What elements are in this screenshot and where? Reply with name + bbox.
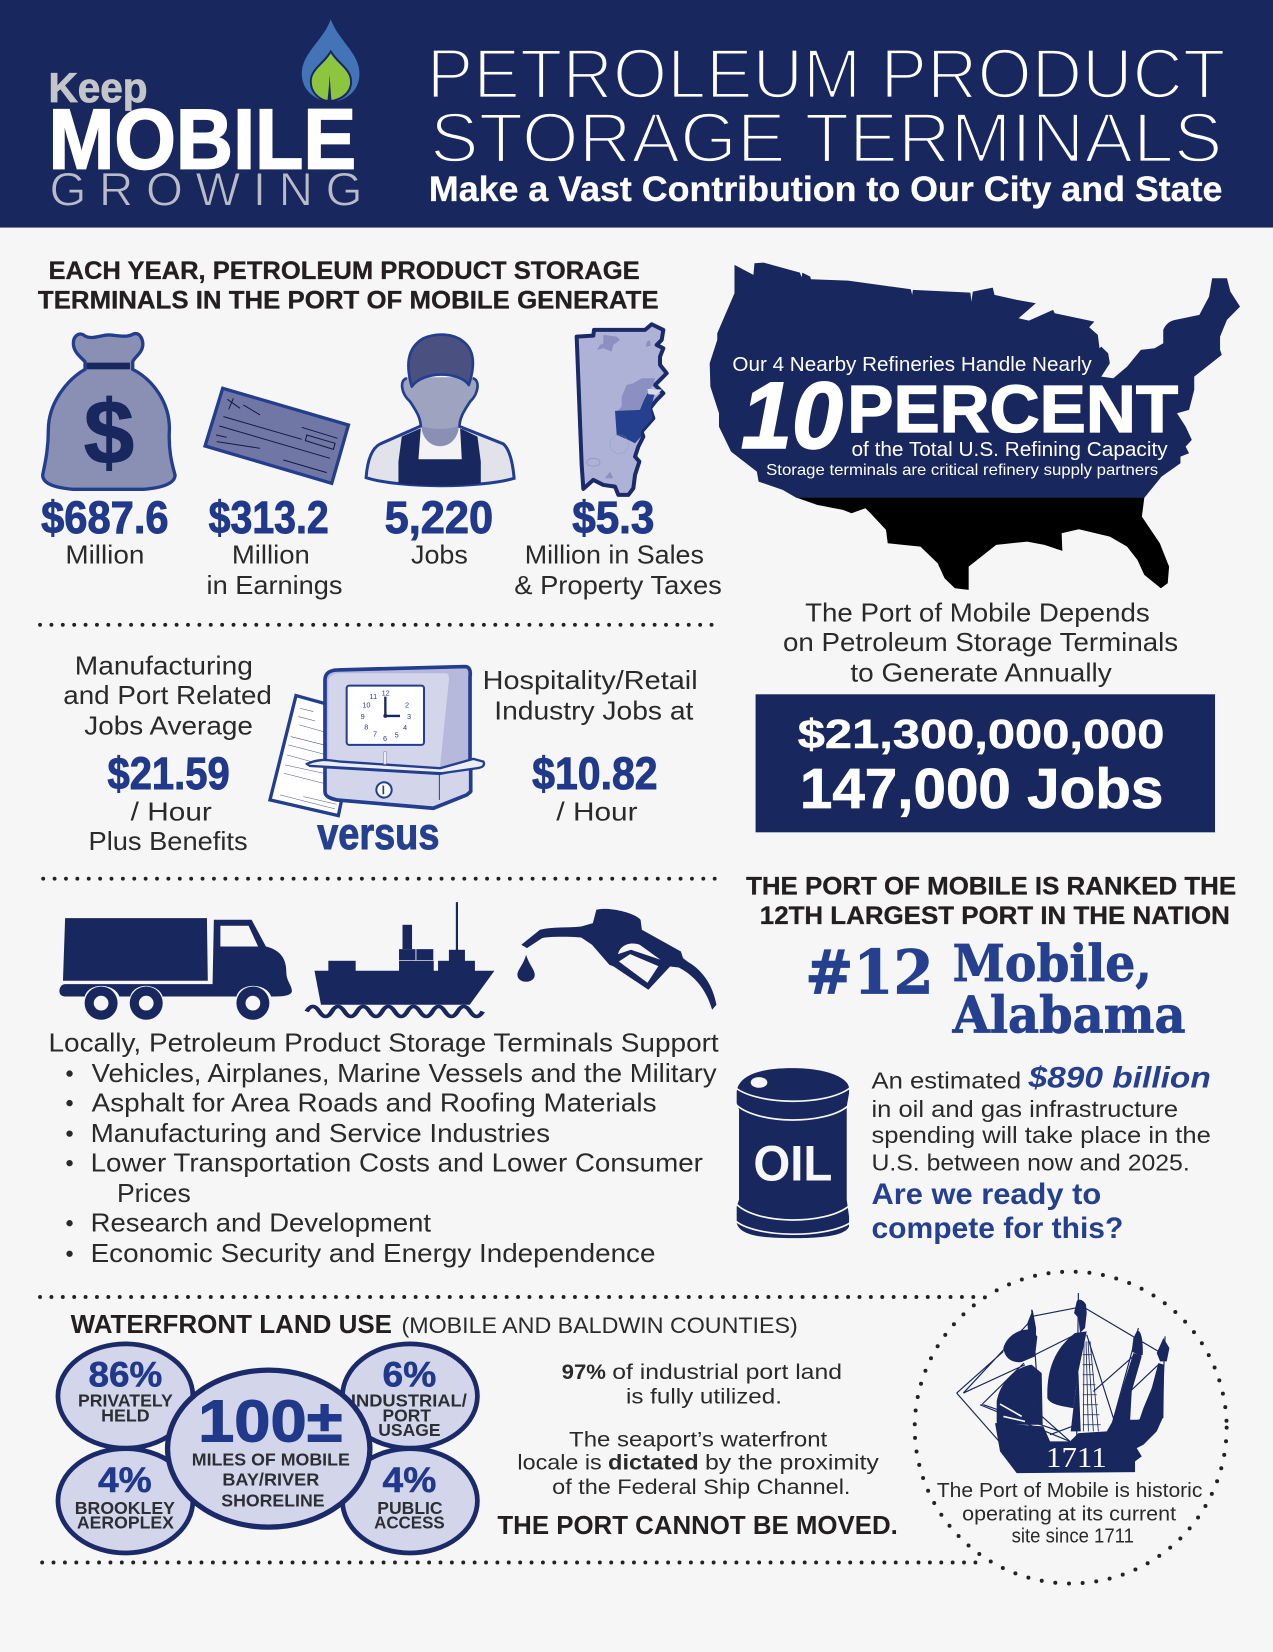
bubble: miles of shoreline: MILES OF MOBILE <box>192 1450 350 1470</box>
stat: jobs <box>385 492 493 570</box>
text: port depends <box>783 598 1178 688</box>
text: port land explanation: dictated <box>608 1450 699 1475</box>
icon: money bag <box>43 334 175 489</box>
stat: earnings: $313.2 <box>209 492 329 543</box>
map: United States split silhouette <box>710 263 1240 590</box>
text: locally support list: Asphalt for Area Roads and Roofing Materials <box>92 1088 657 1118</box>
text: ten percent callout: of the Total U.S. Refining Capacity <box>851 438 1168 461</box>
text: port land explanation: is fully utilized. <box>626 1383 782 1408</box>
text: manufacturing wage <box>63 650 272 856</box>
heading: port ranked <box>746 872 1236 930</box>
stat: earnings: in Earnings <box>207 570 342 600</box>
chart: land use bubbles <box>58 1344 477 1553</box>
text: infrastructure spending: in oil and gas infrastructure <box>871 1096 1178 1122</box>
bubble: privately held: PRIVATELY <box>78 1391 173 1411</box>
text: historic site: site since 1711 <box>1012 1525 1134 1547</box>
heading: waterfront land use <box>71 1309 798 1339</box>
icon: sailing ship 1711 <box>957 1293 1169 1474</box>
icon: sailing ship 1711: 1711 <box>1046 1443 1107 1474</box>
text: number 12 Mobile Alabama: Mobile, <box>953 934 1152 993</box>
panel: waterfront land use <box>58 1309 898 1553</box>
icon: time clock and time card: 3 <box>407 712 411 721</box>
bubble: privately held <box>58 1344 193 1448</box>
title <box>427 34 1226 209</box>
panel: annual port impact <box>756 598 1215 832</box>
text: port land explanation: THE PORT CANNOT BE MOVED. <box>497 1510 898 1540</box>
panel: port ranking <box>736 872 1236 1245</box>
icon: oil drop with leaf <box>302 19 359 101</box>
title: Make a Vast Contribution to Our City and State <box>429 171 1222 209</box>
panel: wage comparison <box>63 650 698 859</box>
text: locally support list: Prices <box>117 1178 191 1208</box>
callout: dollars and jobs <box>756 694 1215 832</box>
icon: time clock and time card: 12 <box>382 689 390 698</box>
text: infrastructure spending: U.S. between now and 2025. <box>871 1150 1190 1176</box>
icon: time clock and time card: 4 <box>403 723 407 732</box>
text: ten percent callout: Storage terminals are critical refinery supply partners <box>766 462 1159 479</box>
text: hospitality wage: Industry Jobs at <box>494 696 694 726</box>
bubble: miles of shoreline: SHORELINE <box>221 1491 325 1511</box>
text: locally support list: Economic Security and Energy Independence <box>91 1238 655 1268</box>
bubble: privately held: 86% <box>89 1357 162 1394</box>
text: locally support list: Locally, Petroleum Product Storage Terminals Support <box>48 1027 719 1057</box>
panel: historic port badge <box>915 1272 1227 1584</box>
heading: waterfront land use: WATERFRONT LAND USE <box>71 1309 392 1339</box>
icon: worker <box>366 335 514 486</box>
stat: taxes: $5.3 <box>572 492 654 543</box>
callout: dollars and jobs: $21,300,000,000 <box>798 711 1164 757</box>
text: locally support list: Research and Development <box>91 1208 432 1238</box>
text: port land explanation: locale is <box>517 1450 602 1475</box>
heading: each year <box>38 257 659 315</box>
text: ten percent callout: Our 4 Nearby Refineries Handle Nearly <box>732 353 1092 376</box>
text: number 12 Mobile Alabama <box>805 934 1186 1044</box>
text: port land explanation: of the Federal Ship Channel. <box>552 1474 850 1499</box>
text: ten percent callout: PERCENT <box>847 373 1178 447</box>
text: historic site: operating at its current <box>962 1503 1177 1525</box>
icon: time clock and time card: 6 <box>383 734 387 743</box>
icon: ship <box>307 902 494 1016</box>
text: manufacturing wage: Manufacturing <box>75 650 253 680</box>
panel: annual generation stats <box>38 257 722 600</box>
stat: economic output: Million <box>65 540 144 570</box>
text: infrastructure spending: An estimated <box>871 1067 1021 1093</box>
title: PETROLEUM PRODUCT <box>427 34 1226 113</box>
heading: each year: TERMINALS IN THE PORT OF MOBILE GENERATE <box>38 287 659 315</box>
text: manufacturing wage: Plus Benefits <box>89 826 248 856</box>
bubble: brookley aeroplex: 4% <box>98 1462 152 1500</box>
bubble: industrial port usage: 6% <box>383 1357 436 1394</box>
heading: each year: EACH YEAR, PETROLEUM PRODUCT STORAGE <box>48 257 640 285</box>
icon: time clock and time card: 10 <box>362 701 370 710</box>
icon: check <box>205 388 348 483</box>
heading: waterfront land use: (MOBILE AND BALDWIN COUNTIES) <box>402 1313 798 1338</box>
bubble: public access: ACCESS <box>374 1513 445 1533</box>
text: manufacturing wage: Jobs Average <box>84 710 253 740</box>
stat: taxes: & Property Taxes <box>514 570 722 600</box>
text: port depends: The Port of Mobile Depends <box>805 598 1150 628</box>
text: port land explanation: by the proximity <box>705 1450 879 1475</box>
bubble: public access <box>342 1449 477 1553</box>
bubble: privately held: HELD <box>101 1405 150 1425</box>
icon: county map of Alabama <box>577 324 667 495</box>
stat: jobs: Jobs <box>411 540 468 570</box>
bubble: industrial port usage <box>342 1344 477 1448</box>
text: number 12 Mobile Alabama: Alabama <box>952 986 1186 1044</box>
text: infrastructure spending: compete for this? <box>871 1212 1123 1245</box>
title: STORAGE TERMINALS <box>430 98 1222 177</box>
panel: header banner <box>0 0 1273 228</box>
text: hospitality wage <box>483 665 698 827</box>
icon: time clock and time card: 2 <box>405 701 409 710</box>
logo: Keep Mobile Growing: Keep <box>48 64 148 111</box>
stat: economic output <box>41 492 169 570</box>
icon: time clock and time card: 9 <box>361 712 365 721</box>
icon: time clock and time card: 7 <box>373 730 377 739</box>
text: port depends: on Petroleum Storage Terminals <box>783 627 1178 657</box>
text: locally support list: Lower Transportation Costs and Lower Consumer <box>91 1148 703 1178</box>
bubble: public access: PUBLIC <box>377 1498 443 1518</box>
icon: time clock and time card: 11 <box>370 692 377 701</box>
bubble: public access: 4% <box>383 1462 436 1500</box>
text: historic site <box>937 1480 1202 1547</box>
text: port land explanation: The seaport’s waterfront <box>569 1427 827 1452</box>
text: port land explanation: of industrial port land <box>612 1359 842 1384</box>
icon: oil barrel: OIL <box>753 1135 832 1191</box>
text: number 12 Mobile Alabama: #12 <box>805 938 934 1009</box>
bubble: miles of shoreline: BAY/RIVER <box>222 1470 320 1490</box>
text: infrastructure spending: $890 billion <box>1027 1061 1211 1094</box>
icon: truck <box>59 918 292 1020</box>
bubble: miles of shoreline: 100± <box>198 1388 342 1454</box>
stat: taxes <box>514 492 722 600</box>
heading: port ranked: 12TH LARGEST PORT IN THE NATION <box>760 902 1230 930</box>
text: ten percent callout <box>732 353 1178 479</box>
bubble: brookley aeroplex: AEROPLEX <box>77 1513 174 1533</box>
panel: local support <box>48 902 719 1268</box>
logo: Keep Mobile Growing: MOBILE <box>48 93 356 188</box>
stat: taxes: Million in Sales <box>525 540 704 570</box>
text: hospitality wage: $10.82 <box>532 748 658 799</box>
stat: earnings <box>207 492 342 600</box>
text: infrastructure spending: Are we ready to <box>871 1178 1101 1211</box>
heading: port ranked: THE PORT OF MOBILE IS RANKED THE <box>746 872 1236 900</box>
text: hospitality wage: Hospitality/Retail <box>483 665 698 695</box>
label: versus: versus <box>317 810 439 859</box>
logo: Keep Mobile Growing: GROWING <box>50 163 363 216</box>
stat: jobs: 5,220 <box>385 492 493 543</box>
text: infrastructure spending <box>871 1061 1211 1245</box>
text: locally support list: Manufacturing and Service Industries <box>91 1118 550 1148</box>
text: port land explanation <box>497 1359 898 1540</box>
panel: refinery map <box>710 263 1240 590</box>
icon: fuel nozzle <box>517 909 716 1010</box>
text: infrastructure spending: spending will take place in the <box>871 1122 1211 1148</box>
bubble: industrial port usage: USAGE <box>378 1420 440 1440</box>
text: hospitality wage: / Hour <box>556 797 638 827</box>
callout: dollars and jobs: 147,000 Jobs <box>800 757 1163 821</box>
text: locally support list: Vehicles, Airplanes, Marine Vessels and the Military <box>92 1058 717 1088</box>
bubble: brookley aeroplex <box>58 1449 193 1553</box>
bubble: miles of shoreline <box>168 1370 370 1527</box>
bubble: brookley aeroplex: BROOKLEY <box>75 1498 175 1518</box>
text: manufacturing wage: $21.59 <box>107 748 230 799</box>
stat: earnings: Million <box>232 540 310 570</box>
stat: economic output: $687.6 <box>41 492 169 543</box>
text: ten percent callout: 10 <box>741 363 843 469</box>
text: port land explanation: 97% <box>562 1359 606 1384</box>
icon: time clock and time card: 5 <box>395 731 399 740</box>
icon: time clock and time card: 8 <box>364 723 368 732</box>
icon: oil barrel <box>736 1068 850 1238</box>
text: manufacturing wage: / Hour <box>131 797 212 827</box>
text: locally support list <box>48 1027 719 1268</box>
text: port depends: to Generate Annually <box>850 658 1113 688</box>
text: historic site: The Port of Mobile is historic <box>937 1480 1202 1502</box>
bubble: industrial port usage: INDUSTRIAL/ <box>351 1391 467 1411</box>
logo: Keep Mobile Growing <box>48 19 363 216</box>
text: manufacturing wage: and Port Related <box>63 680 272 710</box>
icon: time clock and time card <box>270 667 484 816</box>
icon: money bag: $ <box>84 382 134 483</box>
bubble: industrial port usage: PORT <box>383 1405 431 1425</box>
